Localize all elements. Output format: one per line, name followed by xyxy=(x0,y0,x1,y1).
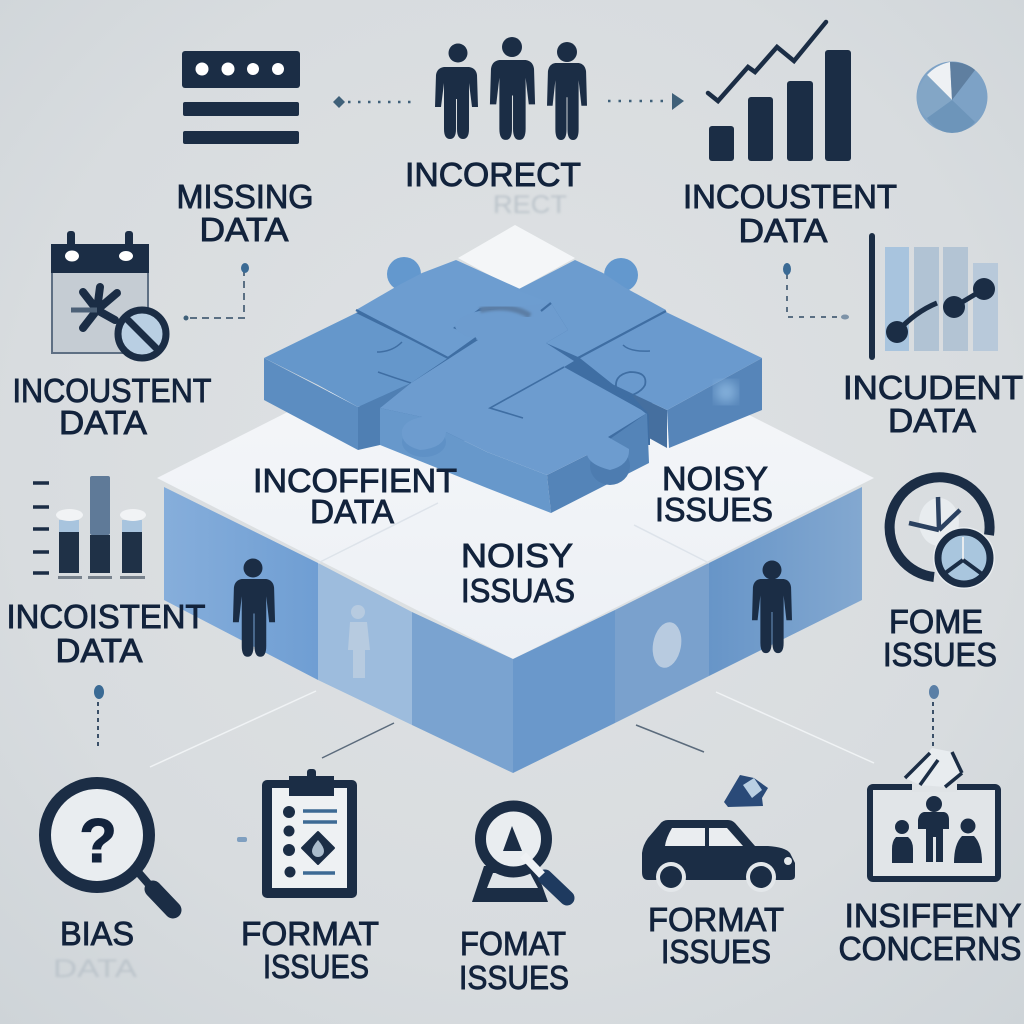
connector lines from platform xyxy=(150,691,874,767)
label: inefficient data: DATA xyxy=(310,493,394,530)
label: incorrect: INCORECT xyxy=(405,156,581,193)
label: insufficiency concerns: CONCERNS xyxy=(838,930,1022,967)
label: missing data: DATA xyxy=(200,211,288,248)
arrow: dotted lower left xyxy=(94,685,104,750)
icon: small bar chart xyxy=(33,476,146,579)
icon: calendar with prohibited sign xyxy=(51,231,166,358)
icon: clipboard checklist xyxy=(237,769,357,898)
label: inefficient data: INCOFFIENT xyxy=(253,462,457,499)
label: format issues left: ISSUES xyxy=(263,948,369,985)
arrow: dotted list to people xyxy=(333,96,415,108)
piece: underlayer xyxy=(356,262,666,445)
platform: left faces xyxy=(164,487,513,773)
label: insufficiency concerns xyxy=(838,897,1022,967)
label: noisy issues centre xyxy=(461,537,575,609)
label: inconsistent data left xyxy=(12,372,212,441)
piece: upper right xyxy=(517,258,666,357)
label: format issues right: FORMAT xyxy=(648,901,784,938)
piece: seams xyxy=(356,303,666,413)
label: format issues centre: FOMAT xyxy=(460,925,566,962)
label: missing data: MISSING xyxy=(176,178,314,215)
label: incorrect xyxy=(405,156,581,219)
label: incident data: INCUDENT xyxy=(843,369,1023,406)
arrow: dotted people to chart xyxy=(608,93,684,110)
label: format issues right: ISSUES xyxy=(661,933,771,970)
icon: missing data list xyxy=(182,51,300,144)
label: bias data: DATA xyxy=(53,955,137,983)
label: inconsistent data lower left: DATA xyxy=(56,632,142,669)
label: fome issues: FOME xyxy=(889,603,983,640)
icon: car xyxy=(642,820,795,892)
platform: top surface xyxy=(157,297,874,659)
icon: faded figure xyxy=(348,605,370,678)
label: fome issues xyxy=(883,603,997,673)
label: bias data xyxy=(53,915,137,983)
icon: pie chart xyxy=(916,62,988,133)
icon: circular gauge xyxy=(890,477,995,589)
arrow: dotted calendar connector xyxy=(184,263,249,320)
icon: magnifier with triangle xyxy=(472,806,567,902)
label: noisy issues right: NOISY xyxy=(662,460,768,497)
platform: back tip xyxy=(458,225,575,290)
label: bias data: BIAS xyxy=(60,915,134,952)
label: format issues right xyxy=(648,901,784,970)
label: format issues left xyxy=(241,915,379,985)
icon: faded badge xyxy=(649,620,685,670)
label: inconsistent data top right: DATA xyxy=(738,212,828,249)
label: format issues left: FORMAT xyxy=(241,915,379,952)
label: noisy issues centre: NOISY xyxy=(461,537,573,574)
piece: left xyxy=(264,313,448,450)
label: noisy issues right: ISSUES xyxy=(655,491,773,528)
platform: right faces xyxy=(513,487,862,773)
label: inconsistent data lower left: INCOISTENT xyxy=(6,598,206,635)
icon: magnifier with question mark: ? xyxy=(79,807,117,876)
label: inconsistent data left: INCOUSTENT xyxy=(12,372,212,409)
label: noisy issues right xyxy=(655,460,773,528)
label: fome issues: ISSUES xyxy=(883,636,997,673)
piece: upper left xyxy=(356,257,551,357)
label: inconsistent data left: DATA xyxy=(59,404,147,441)
piece: centre and front xyxy=(380,303,649,513)
label: inconsistent data top right xyxy=(683,178,897,249)
piece: right xyxy=(578,312,762,448)
icon: magnifier with question mark xyxy=(45,783,173,910)
icon: bar and line chart xyxy=(708,22,851,161)
label: noisy issues centre: ISSUAS xyxy=(461,572,575,609)
icon: group in frame xyxy=(870,748,998,879)
arrow: dotted lower right xyxy=(929,685,939,750)
icon: three people xyxy=(435,37,587,140)
platform xyxy=(157,225,874,773)
label: inconsistent data lower left xyxy=(6,598,206,669)
arrow: dotted grid connector xyxy=(783,263,849,320)
label: missing data xyxy=(176,178,314,248)
puzzle pieces xyxy=(264,257,762,513)
label: format issues centre: ISSUES xyxy=(459,959,569,996)
icon: person on left face xyxy=(233,558,275,657)
icon: person on right face xyxy=(752,560,792,653)
label: format issues centre xyxy=(459,925,569,996)
label: incident data xyxy=(843,369,1023,439)
icon: small warning shape xyxy=(724,775,768,807)
label: inefficient data xyxy=(253,462,457,530)
label: incident data: DATA xyxy=(888,402,976,439)
icon: column grid with trend line xyxy=(869,233,998,360)
label: insufficiency concerns: INSIFFENY xyxy=(844,897,1022,934)
label: incorrect: RECT xyxy=(493,191,567,219)
label: inconsistent data top right: INCOUSTENT xyxy=(683,178,897,215)
